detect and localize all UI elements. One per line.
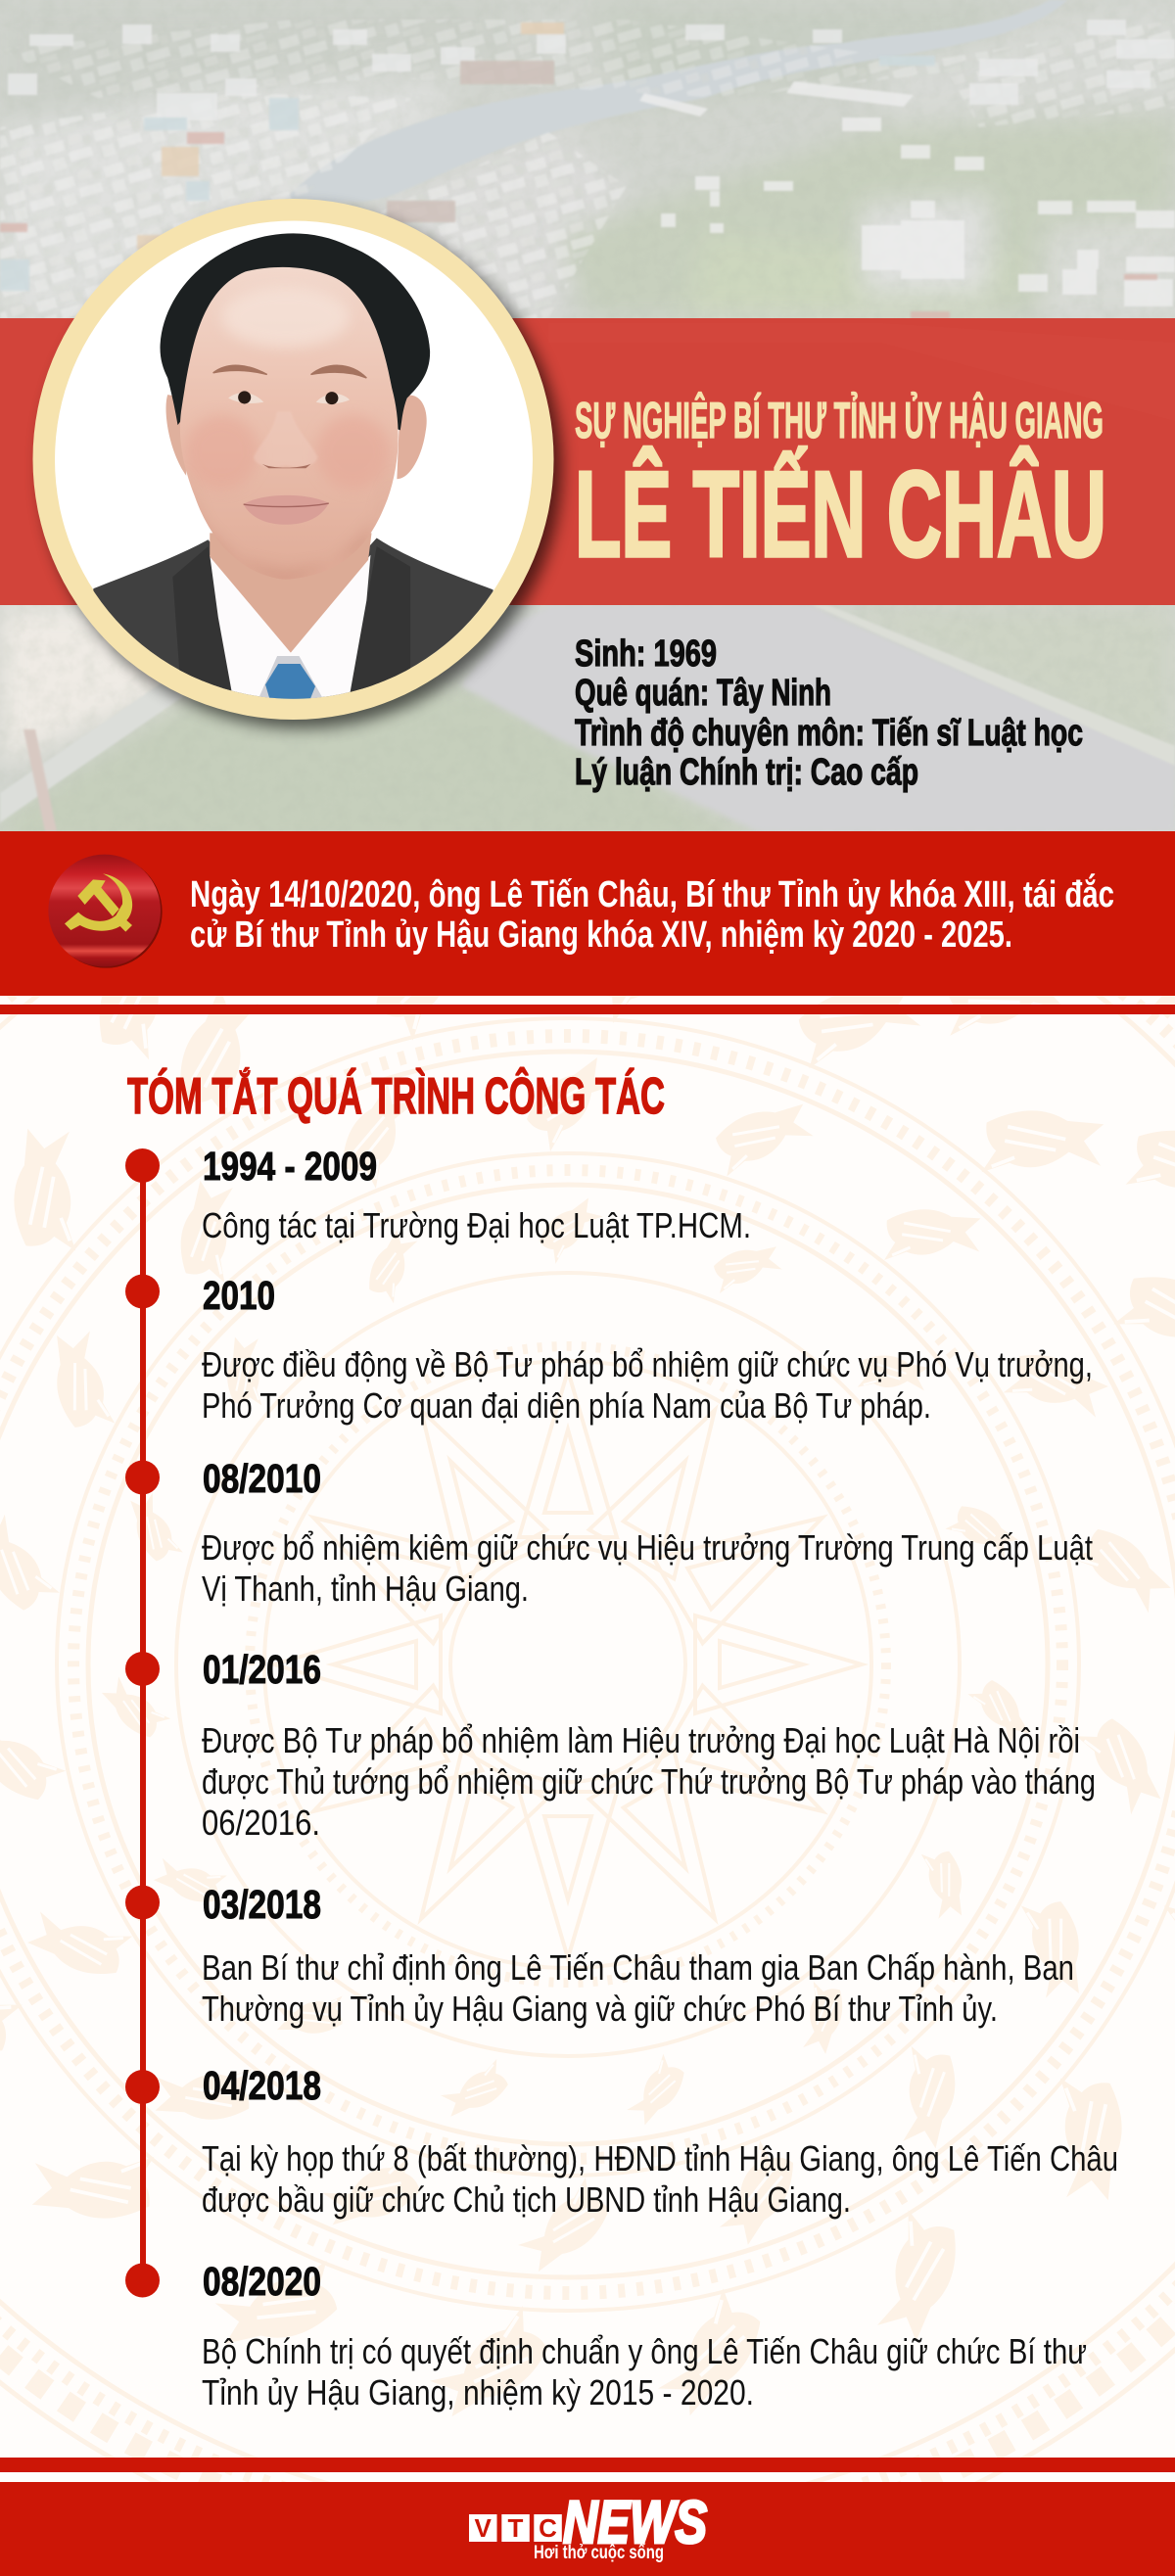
- logo: VTC News: NEWS: [563, 2489, 707, 2555]
- entry: 1994 - 2009: [125, 1144, 751, 1245]
- detail: birth: Sinh: 1969: [575, 633, 717, 675]
- logo: VTC News: V: [475, 2513, 493, 2543]
- entry: 08/2020: Tỉnh ủy Hậu Giang, nhiệm kỳ 2015 - 2020.: [202, 2372, 754, 2412]
- icon: party emblem: [48, 855, 163, 968]
- logo: VTC News: [469, 2489, 707, 2563]
- icon: jacket: [93, 539, 494, 699]
- icon: eyes: [228, 393, 350, 403]
- text block: personal details: [575, 633, 1083, 793]
- entry: 2010: Phó Trưởng Cơ quan đại diện phía Nam của Bộ Tư pháp.: [202, 1385, 931, 1426]
- foliage texture: [2, 155, 261, 737]
- icon: brows: [213, 365, 366, 378]
- heading: career summary: TÓM TẮT QUÁ TRÌNH CÔNG TÁC: [127, 1067, 665, 1125]
- detail: hometown: Quê quán: Tây Ninh: [575, 673, 831, 714]
- entry: 01/2016: [125, 1647, 1096, 1843]
- lower photo: [0, 605, 1175, 831]
- icon: hair: [161, 233, 430, 430]
- entry: 1994 - 2009: 1994 - 2009: [203, 1144, 377, 1189]
- logo: VTC News: T: [508, 2513, 524, 2543]
- icon: neck: [210, 533, 372, 653]
- panel: red summary band: [0, 831, 1175, 1014]
- houses: [0, 20, 1175, 319]
- timeline line: [140, 1165, 146, 2280]
- entry: 08/2020: 08/2020: [203, 2259, 321, 2304]
- entry: 08/2010: 08/2010: [203, 1456, 321, 1501]
- icon: face: [180, 266, 399, 535]
- portrait in cream ring: [33, 199, 562, 735]
- entry: 01/2016: 01/2016: [203, 1647, 321, 1692]
- icon: shirt collar: [210, 555, 370, 702]
- entry: 04/2018: [125, 2063, 1118, 2220]
- entry: 2010: 2010: [203, 1273, 275, 1318]
- entry: 03/2018: [125, 1882, 1074, 2029]
- panel: page background with bronze drum pattern: [0, 996, 1175, 2482]
- logo: VTC News: C: [539, 2513, 557, 2543]
- dense town texture: [0, 20, 1175, 318]
- entry: 03/2018: 03/2018: [203, 1882, 321, 1927]
- icon: ears: [166, 395, 188, 476]
- entry: 08/2010: Vị Thanh, tỉnh Hậu Giang.: [202, 1569, 529, 1609]
- detail: political theory: Lý luận Chính trị: Cao cấp: [575, 752, 918, 793]
- panel: timeline: [125, 1144, 1118, 2412]
- entry: 08/2020: [125, 2259, 1087, 2412]
- entry: 01/2016: 06/2016.: [202, 1803, 320, 1843]
- panel: aerial photo background: [0, 0, 1175, 852]
- entry: 08/2010: [125, 1456, 1093, 1609]
- panel: red title band: [0, 318, 1175, 605]
- entry: 04/2018: 04/2018: [203, 2063, 321, 2108]
- icon: tie: [258, 656, 323, 698]
- icon: lips: [244, 495, 329, 525]
- panel: footer: [0, 2458, 1175, 2576]
- icon: nose: [254, 411, 317, 467]
- logo tagline: Hơi thở cuộc sống: [534, 2543, 664, 2563]
- entry: 1994 - 2009: Công tác tại Trường Đại học Luật TP.HCM.: [202, 1205, 751, 1245]
- river: [277, 0, 1067, 208]
- entry: 04/2018: được bầu giữ chức Chủ tịch UBND tỉnh Hậu Giang.: [202, 2179, 851, 2220]
- entry: 03/2018: Thường vụ Tỉnh ủy Hậu Giang và giữ chức Phó Bí thư Tỉnh ủy.: [202, 1989, 998, 2029]
- entry: 2010: [125, 1273, 1093, 1426]
